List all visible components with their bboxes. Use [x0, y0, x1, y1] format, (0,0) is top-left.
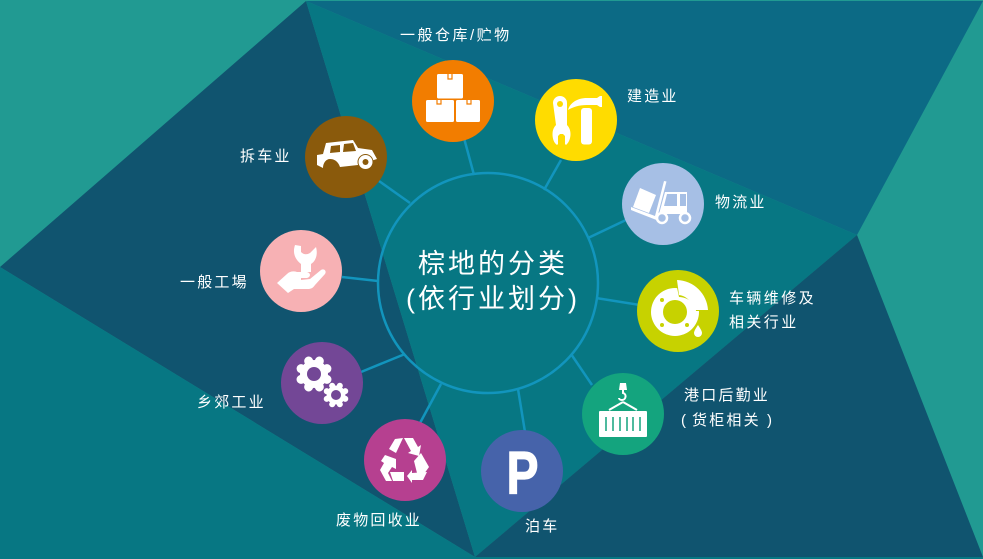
item: port logistics: 货柜相关 — [692, 412, 761, 429]
item: rural industry: 乡郊工业 — [197, 394, 266, 411]
item: car dismantling — [240, 116, 387, 198]
item: general factory: 一般工場 — [180, 274, 249, 291]
item: port logistics: 港口后勤业 — [684, 387, 770, 404]
central circle with title: 棕地的分类 — [418, 249, 568, 279]
central circle with title — [378, 173, 598, 393]
item: parking: 泊车 — [525, 518, 559, 535]
item: vehicle repair: 车辆维修及 — [729, 290, 816, 307]
item: general warehouse — [400, 27, 512, 142]
item: port logistics: ) — [767, 412, 774, 429]
item: car dismantling: 拆车业 — [240, 148, 292, 165]
item: vehicle repair: 相关行业 — [729, 314, 799, 331]
item: logistics: 物流业 — [715, 194, 767, 211]
item: parking — [481, 430, 563, 535]
item: waste recycling: 废物回收业 — [336, 512, 422, 529]
item: vehicle repair — [637, 270, 816, 352]
central circle with title: (依行业划分) — [406, 284, 580, 314]
item: general warehouse: 一般仓库/贮物 — [400, 27, 512, 44]
item: construction — [535, 79, 679, 161]
connector lines — [342, 138, 640, 432]
item: general factory — [180, 230, 342, 312]
item: port logistics: ( — [681, 412, 688, 429]
item: logistics — [622, 163, 767, 245]
item: port logistics — [582, 373, 774, 455]
item: construction: 建造业 — [627, 88, 679, 105]
item: parking: P — [506, 439, 539, 507]
item: waste recycling — [336, 419, 446, 529]
item: rural industry — [197, 342, 363, 424]
